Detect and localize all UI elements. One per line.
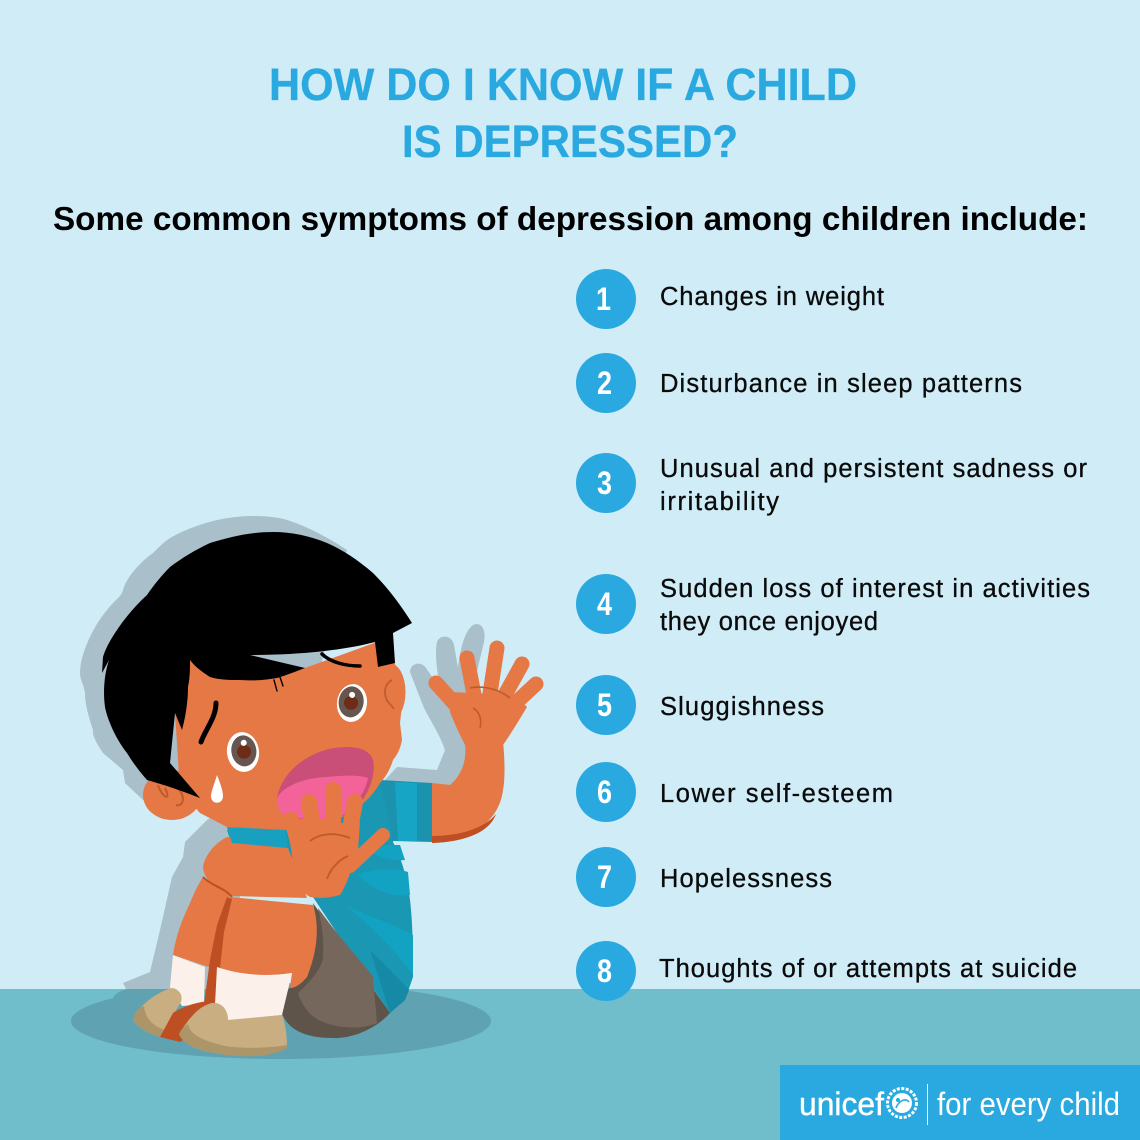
raised hand	[436, 648, 536, 745]
title: IS DEPRESSED?	[402, 116, 738, 167]
front hand	[285, 790, 383, 898]
item 4: they once enjoyed	[660, 608, 878, 636]
leg crease	[204, 897, 232, 1004]
item 7	[576, 847, 832, 907]
title	[269, 59, 857, 167]
unicef logo panel: for every child	[937, 1086, 1120, 1122]
item 2: Disturbance in sleep patterns	[660, 370, 1022, 398]
item 6	[576, 762, 893, 822]
symptom list	[576, 269, 1090, 1001]
floor band	[0, 989, 1140, 1140]
shorts	[280, 903, 390, 1038]
item 5	[576, 675, 824, 735]
item 4	[576, 574, 1090, 636]
item 8	[576, 941, 1077, 1001]
wall shadow on floor	[113, 989, 200, 1013]
subtitle: Some common symptoms of depression among children include:	[53, 200, 1088, 237]
shoes	[133, 988, 287, 1056]
item 6: Lower self-esteem	[660, 780, 893, 808]
item 8: 8	[597, 953, 612, 989]
ear right	[376, 664, 406, 720]
item 8: Thoughts of or attempts at suicide	[659, 955, 1077, 983]
item 3	[576, 453, 1088, 516]
item 1	[576, 269, 884, 329]
illustration: sad child	[71, 516, 536, 1059]
face	[175, 642, 403, 830]
item 7: Hopelessness	[660, 865, 832, 893]
item 3: irritability	[660, 488, 779, 516]
item 4: 4	[597, 586, 612, 622]
hugging arm	[203, 837, 307, 898]
eyebrows and wrinkles	[201, 654, 360, 742]
eye right	[335, 682, 369, 724]
item 2	[576, 353, 1022, 413]
raised arm	[432, 742, 504, 842]
front leg	[217, 897, 317, 988]
item 7: 7	[597, 859, 612, 895]
item 2: 2	[597, 365, 612, 401]
item 4: Sudden loss of interest in activities	[660, 575, 1090, 603]
unicef logo panel: unicef	[799, 1086, 884, 1122]
item 5: 5	[597, 687, 612, 723]
arm crease	[203, 877, 232, 897]
socks	[170, 955, 292, 1021]
tear	[211, 775, 223, 803]
icon: UN emblem	[888, 1088, 916, 1118]
title: HOW DO I KNOW IF A CHILD	[269, 59, 857, 110]
shirt	[227, 780, 432, 1013]
ear left	[143, 770, 201, 820]
item 1: Changes in weight	[660, 283, 884, 311]
mouth	[277, 747, 374, 820]
back leg	[173, 877, 230, 970]
wall shadow of child	[80, 516, 485, 989]
item 5: Sluggishness	[660, 693, 824, 721]
shirt collar	[227, 827, 288, 848]
item 6: 6	[597, 774, 612, 810]
unicef logo panel	[780, 1065, 1140, 1140]
item 3: 3	[597, 465, 612, 501]
eye left	[224, 730, 262, 774]
item 3: Unusual and persistent sadness or	[660, 455, 1088, 483]
hair	[102, 532, 412, 798]
arm underside	[432, 814, 496, 843]
floor shadow	[71, 983, 491, 1059]
item 1: 1	[596, 281, 611, 317]
